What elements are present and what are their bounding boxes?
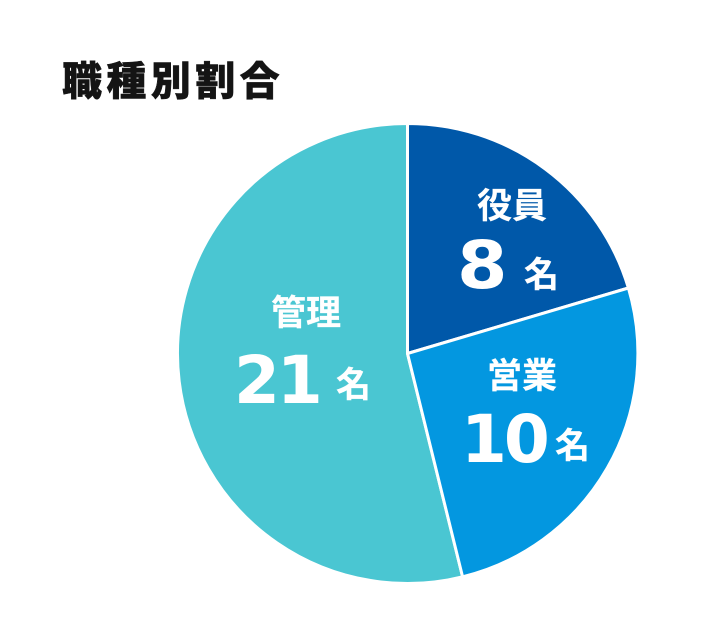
label: 役員 8名: 役員 <box>477 187 547 226</box>
label: 管理 21名: 名 <box>336 366 371 405</box>
slice: 営業 <box>408 288 638 577</box>
label: 管理 21名 <box>234 294 371 419</box>
label: 役員 8名: 名 <box>524 256 559 295</box>
pie chart <box>177 123 638 584</box>
title: 職種別割合 <box>62 60 284 104</box>
slice: 役員 <box>408 123 628 354</box>
label: 営業 10名: 10 <box>461 401 547 478</box>
label: 役員 8名: 8 <box>457 228 508 304</box>
slice: 管理 <box>177 123 463 584</box>
label: 役員 8名 <box>457 187 559 304</box>
label: 管理 21名: 21 <box>234 342 320 419</box>
label: 営業 10名: 営業 <box>487 357 557 396</box>
label: 管理 21名: 管理 <box>271 294 341 333</box>
label: 営業 10名 <box>461 357 590 478</box>
label: 営業 10名: 名 <box>555 427 590 466</box>
